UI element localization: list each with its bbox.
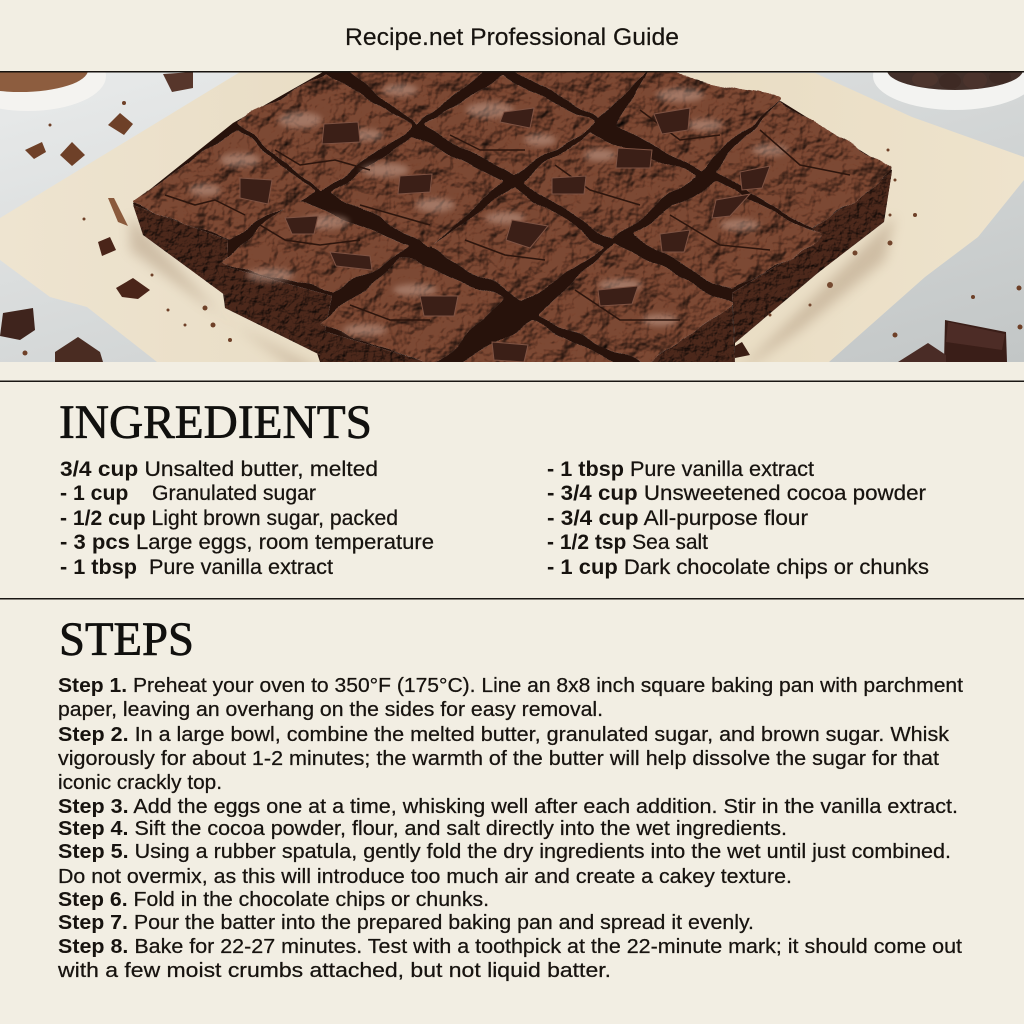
divider rule above steps bbox=[0, 598, 1024, 600]
ingredients left column: - 1 tbsp Pure vanilla extract bbox=[60, 556, 333, 579]
ingredients right column: - 1 cup Dark chocolate chips or chunks bbox=[547, 556, 929, 579]
marble counter bbox=[0, 72, 1024, 362]
crumbs bbox=[22, 101, 1022, 358]
steps text: Do not overmix, as this will introduce too much air and create a cakey texture. bbox=[58, 865, 792, 888]
steps text: paper, leaving an overhang on the sides for easy removal. bbox=[58, 698, 603, 721]
brownie crust tops bbox=[135, 69, 892, 367]
crust cracks bbox=[165, 110, 850, 320]
steps text: Step 8. Bake for 22-27 minutes. Test with a toothpick at the 22-minute mark; it should come out bbox=[58, 935, 962, 958]
steps text: with a few moist crumbs attached, but not liquid batter. bbox=[57, 959, 611, 982]
chocolate chunks bbox=[0, 72, 1007, 362]
divider rule above ingredients bbox=[0, 380, 1024, 382]
bowl of chocolate chips bbox=[873, 72, 1024, 110]
steps text: vigorously for about 1-2 minutes; the warmth of the butter will help dissolve the sugar for that bbox=[58, 747, 939, 770]
ingredients heading: INGREDIENTS bbox=[59, 396, 372, 449]
ingredients left column: - 1 cup Granulated sugar bbox=[60, 482, 316, 505]
steps text: iconic crackly top. bbox=[58, 771, 222, 794]
shadow under brownie slab bbox=[130, 215, 895, 372]
ingredients right column: - 3/4 cup Unsweetened cocoa powder bbox=[547, 482, 926, 505]
brownie slab base bbox=[133, 72, 892, 362]
steps text: Step 3. Add the eggs one at a time, whisking well after each addition. Stir in the vanilla extract. bbox=[58, 795, 958, 818]
steps text: Step 4. Sift the cocoa powder, flour, and salt directly into the wet ingredients. bbox=[58, 817, 787, 840]
ingredients left column: - 1/2 cup Light brown sugar, packed bbox=[60, 507, 398, 530]
ingredients right column bbox=[547, 458, 929, 579]
steps panel bbox=[57, 613, 963, 982]
steps text: Step 7. Pour the batter into the prepared baking pan and spread it evenly. bbox=[58, 911, 754, 934]
chocolate chunks on top bbox=[240, 108, 770, 362]
side faces bbox=[133, 172, 892, 364]
divider rule top bbox=[0, 71, 1024, 72]
steps text: Step 6. Fold in the chocolate chips or chunks. bbox=[58, 888, 489, 911]
steps heading: STEPS bbox=[59, 613, 194, 666]
ingredients left column: 3/4 cup Unsalted butter, melted bbox=[60, 458, 378, 481]
parchment paper bbox=[0, 72, 1024, 362]
steps text bbox=[57, 674, 963, 982]
steps text: Step 1. Preheat your oven to 350°F (175°C). Line an 8x8 inch square baking pan with parchment bbox=[58, 674, 963, 697]
ingredients right column: - 1 tbsp Pure vanilla extract bbox=[547, 458, 814, 481]
hero photo: brownies on parchment bbox=[0, 72, 1024, 362]
crust highlights bbox=[189, 84, 788, 336]
ingredients left column bbox=[60, 458, 434, 579]
ingredients right column: - 3/4 cup All-purpose flour bbox=[547, 507, 808, 530]
title: Recipe.net Professional Guide bbox=[345, 24, 679, 51]
steps text: Step 5. Using a rubber spatula, gently fold the dry ingredients into the wet until just combined. bbox=[58, 840, 951, 863]
ingredients right column: - 1/2 tsp Sea salt bbox=[547, 531, 708, 554]
ingredients panel bbox=[59, 396, 929, 579]
bowl of cocoa powder bbox=[0, 72, 106, 111]
ingredients left column: - 3 pcs Large eggs, room temperature bbox=[60, 531, 434, 554]
steps text: Step 2. In a large bowl, combine the melted butter, granulated sugar, and brown sugar. Whisk bbox=[58, 723, 950, 746]
